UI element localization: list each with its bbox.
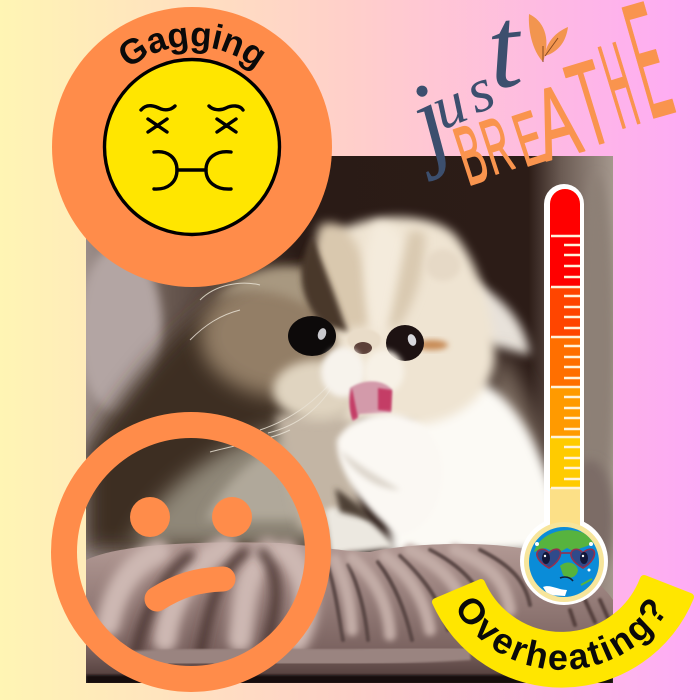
thermometer [520,184,608,605]
icon: sad face outline [64,425,318,679]
logo word: BREATHE [444,0,687,203]
logo word: BREATHE: B [444,106,498,203]
banner text: Overheating? [458,598,664,670]
cat forehead tufts [315,223,370,330]
cat photo [78,156,614,684]
cat nose and muzzle [348,331,380,348]
logo word: just: u [422,68,476,143]
logo word: BREATHE: H [588,16,650,154]
cat paw [334,409,420,534]
heading: Gagging: Gagging [120,24,265,71]
logo word: BREATHE: T [554,35,625,173]
cat dark left fur [86,304,275,560]
cat white body [390,380,565,555]
cat white mane [465,280,530,355]
logo word: just [379,0,530,184]
icon: gagging face [104,60,280,234]
logo word: BREATHE: R [471,100,522,191]
logo word: just: j [379,60,466,184]
cat head [325,217,495,425]
banner: overheating [432,575,694,688]
cat eyes [288,316,424,361]
thermometer tube [544,184,584,554]
icon: leaves [529,14,568,62]
icon: earth with heart glasses [524,522,604,602]
logo word: BREATHE: A [522,63,591,182]
logo: just breathe [379,0,687,203]
badge: gagging [52,7,332,287]
logo word: just: s [456,55,504,127]
logo word: BREATHE: E [504,94,554,183]
cat tongue [349,381,392,421]
cat whiskers [190,283,342,452]
cushion [86,542,613,684]
cat lower left fur [130,420,350,545]
